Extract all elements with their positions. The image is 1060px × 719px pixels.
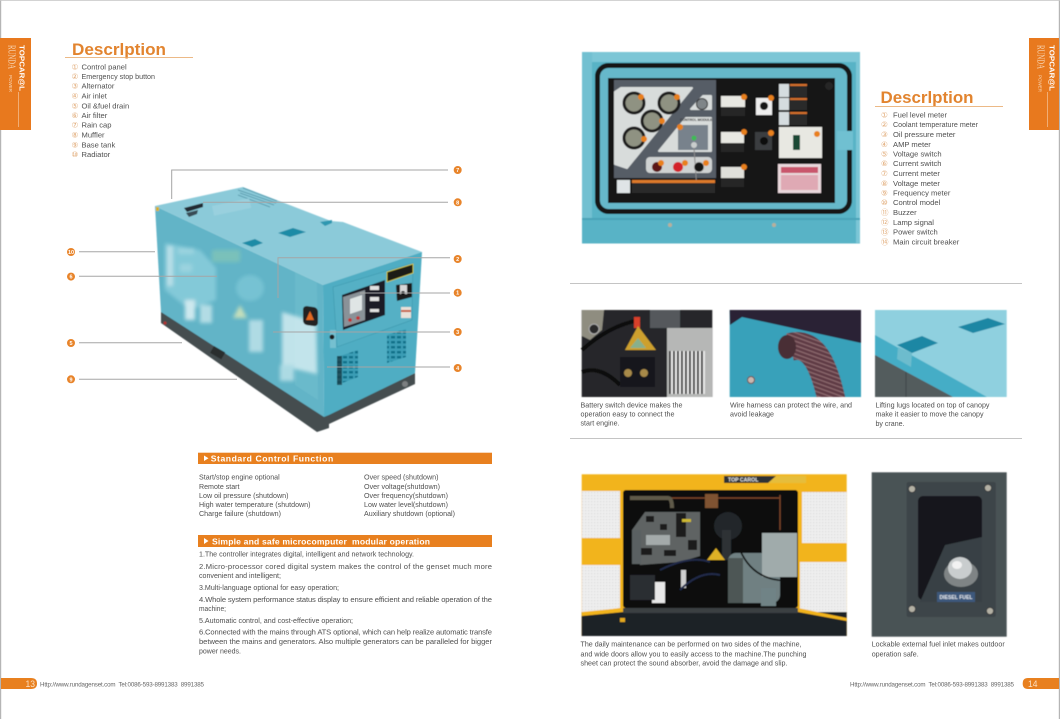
numbered paragraph: 2.Micro-processor cored digital system makes the control of the genset much more: [199, 562, 492, 571]
section: microcomputer modular operation: [198, 535, 492, 656]
footer left: Http://www.rundagenset.com Tel:0086-593-8991383 8991385: [40, 682, 205, 689]
parts list right: Oil pressure meter: [893, 130, 956, 139]
numbered paragraph: 6.Connected with the mains through ATS optional, which can help realize automatic transfe: [199, 628, 492, 636]
parts list right: Lamp signal: [893, 218, 934, 227]
base frame: [161, 311, 415, 432]
engine bay: [623, 490, 798, 608]
top panel: [155, 187, 422, 285]
rain cap: [184, 203, 203, 217]
black mounting plate: [608, 78, 835, 203]
red warning label: [778, 164, 821, 193]
parts list right: Power switch: [893, 228, 938, 236]
parts list left: ①: [72, 62, 78, 71]
function list column 2: Over voltage(shutdown): [364, 482, 440, 491]
photo: control panel: [582, 52, 860, 244]
heading: description right: Descrlption: [880, 89, 974, 107]
parts list right: ⑤: [881, 150, 888, 158]
door gasket: [598, 66, 850, 212]
panel markers: [638, 94, 820, 170]
parts list left: Control panel: [82, 62, 127, 71]
function list column 1: High water temperature (shutdown): [199, 500, 311, 509]
parts list left: Base tank: [82, 140, 115, 149]
numbered paragraph: power needs.: [199, 646, 241, 656]
function list column 2: Auxiliary shutdown (optional): [364, 509, 455, 518]
parts list left: Air filter: [82, 111, 108, 120]
function list column 1: Charge failure (shutdown): [199, 509, 281, 518]
battery switch and filters: [707, 548, 725, 560]
parts list left: ⑥: [72, 111, 78, 120]
callout markers: 8: [456, 200, 459, 206]
fuel label: DIESEL FUEL: [940, 595, 972, 601]
callout markers: 7: [456, 168, 459, 174]
parts list right: ⑩: [881, 198, 888, 207]
warning stickers: [779, 84, 807, 97]
function list column 2: [364, 472, 455, 518]
caption: battery switch: operation easy to connect the: [580, 410, 674, 418]
caption: daily maintenance: The daily maintenance can be performed on two sides of the machine,: [580, 640, 802, 649]
brand name RUNDA: RUNDA: [6, 45, 16, 70]
side vents: [337, 350, 358, 385]
brand word POWER: POWER: [8, 75, 13, 93]
brand name TOPCAROL: TOPCAR@L: [18, 45, 26, 91]
function list column 1: Low oil pressure (shutdown): [199, 491, 289, 500]
yellow label: [387, 264, 413, 282]
caption: fuel inlet: operation safe.: [872, 649, 919, 658]
parts list right: Control model: [893, 198, 941, 207]
parts list right: ②: [881, 120, 888, 129]
caption: battery switch: [580, 400, 682, 428]
heading: description left: Descrlption: [72, 41, 166, 59]
hinges and screws: [837, 131, 853, 150]
parts list right: Current switch: [893, 159, 942, 168]
parts list right: ⑥: [881, 159, 888, 168]
numbered paragraph: 3.Multi-language optional for easy operation;: [199, 583, 339, 592]
parts list right: Frequency meter: [893, 188, 951, 198]
buttons: [652, 162, 662, 172]
brand name TOPCAROL: TOPCAR@L: [1048, 45, 1056, 91]
caption: wire harness: Wire harness can protect the wire, and: [730, 400, 852, 410]
parts list left: Radiator: [82, 150, 111, 159]
ghost engine view: [165, 243, 317, 381]
function list column 1: Start/stop engine optional: [199, 472, 280, 481]
footer right: 14: [1028, 679, 1038, 689]
photo: battery switch: [582, 310, 712, 397]
caption: daily maintenance: and wide doors allow you to easily access to the machine.The punching: [580, 649, 806, 658]
photo: fuel inlet: [872, 472, 1007, 637]
numbered paragraph: convenient and intelligent;: [199, 571, 281, 580]
numbered paragraph: 5.Automatic control, and cost-effective operation;: [199, 616, 353, 625]
parts list left: ⑤: [72, 101, 78, 110]
parts list right: ⑫: [881, 218, 889, 227]
caption: fuel inlet: [872, 640, 1005, 658]
parts list right: Fuel level meter: [893, 110, 947, 120]
parts list right: Buzzer: [893, 208, 917, 217]
parts list left: [72, 62, 155, 159]
footer right: Http://www.rundagenset.com Tel:0086-593-8991383 8991385: [850, 682, 1015, 689]
lifting slots: [242, 239, 263, 247]
parts list right: ①: [881, 110, 888, 120]
parts list left: ⑧: [72, 131, 78, 140]
heading bar: Standard Control Function: [211, 453, 333, 463]
numbered paragraph: machine;: [199, 604, 226, 613]
callout leader lines: [79, 170, 450, 379]
function list column 1: [199, 472, 311, 518]
parts list left: ⑦: [72, 121, 78, 130]
top vents: [238, 188, 277, 207]
control module: [678, 125, 708, 150]
numbered paragraph: between the mains and generators. Also multiple generators can be paralleled for bigger: [199, 637, 492, 646]
engine block: [632, 512, 700, 565]
parts list left: Air inlet: [82, 91, 108, 100]
function list column 2: Low water level(shutdown): [364, 500, 448, 509]
callout markers: 4: [456, 366, 460, 372]
section: standard control function: [198, 453, 492, 518]
gauge panel: [614, 80, 716, 178]
parts list right: Coolant temperature meter: [893, 120, 978, 129]
base: [582, 612, 847, 636]
parts list left: ④: [72, 91, 78, 100]
parts list left: Rain cap: [82, 121, 111, 130]
function list column 2: Over speed (shutdown): [364, 472, 439, 481]
generator illustration: [155, 187, 422, 432]
caption: lifting lugs: by crane.: [876, 419, 904, 428]
parts list left: Emergency stop button: [82, 72, 155, 81]
callout markers: 3: [456, 330, 459, 336]
left brand tab: [0, 38, 31, 130]
control screen: [342, 280, 385, 330]
door panel on side: [295, 272, 318, 400]
caption: battery switch: start engine.: [580, 418, 620, 428]
caption: daily maintenance: sheet can protect the sound absorber, avoid the damage and slip.: [580, 659, 788, 668]
caption: lifting lugs: Lifting lugs located on top of canopy: [876, 400, 990, 410]
brand name RUNDA: RUNDA: [1034, 45, 1046, 70]
fuel cap: [944, 561, 978, 587]
parts list right: AMP meter: [893, 140, 931, 149]
caption: lifting lugs: [876, 400, 990, 428]
parts list right: Main circuit breaker: [893, 238, 960, 246]
parts list right: ③: [881, 130, 888, 139]
parts list right: Voltage meter: [893, 179, 940, 188]
parts list right: ⑬: [881, 228, 889, 236]
warning strip: [617, 180, 630, 193]
callout markers: 6: [69, 275, 73, 281]
photo: wire harness: [730, 310, 861, 402]
parts list right: ⑪: [881, 208, 889, 217]
control door: [333, 263, 413, 347]
footer left: [1, 678, 205, 689]
parts list right: ④: [881, 140, 888, 149]
function list column 1: Remote start: [199, 482, 240, 491]
photo: control panel: CONTROL MODULE: [680, 118, 713, 122]
right brand tab: [1029, 38, 1059, 130]
warning sticker: [401, 307, 411, 318]
parts list right: Current meter: [893, 169, 940, 178]
front panel: [323, 252, 422, 417]
gauges: [624, 93, 679, 148]
meters: [721, 96, 745, 107]
callout markers: 2: [456, 257, 459, 263]
callout markers: 10: [68, 250, 74, 256]
caption: fuel inlet: Lockable external fuel inlet makes outdoor: [872, 640, 1005, 649]
footer left: 13: [26, 679, 35, 689]
heading bar: Simple and safe microcomputer modular operation: [212, 536, 430, 546]
numbered paragraph: 1.The controller integrates digital, intelligent and network technology.: [199, 550, 414, 558]
alternator: [728, 553, 780, 603]
parts list right: ⑧: [881, 179, 888, 188]
parts list right: ⑦: [881, 169, 888, 178]
numbered paragraph: 4.Whole system performance status display to ensure efficient and reliable operation of the: [199, 595, 492, 604]
parts list left: Muffler: [82, 131, 105, 140]
callout markers: 5: [69, 341, 73, 347]
left side panel: [155, 206, 324, 417]
canopy brand label: TOP CAROL: [728, 478, 759, 484]
parts list right: ⑨: [881, 188, 888, 198]
function list column 2: Over frequency(shutdown): [364, 491, 448, 500]
parts list left: ③: [72, 82, 78, 91]
caption: wire harness: avoid leakage: [730, 410, 774, 418]
caption: wire harness: [730, 400, 852, 418]
callout markers: [67, 166, 462, 383]
callout markers: 1: [456, 291, 459, 297]
muffler button: [303, 306, 318, 327]
fuel label: [937, 592, 975, 602]
callout markers: 9: [69, 377, 73, 383]
lock: [330, 330, 336, 348]
photo: open canopy with engine: [582, 474, 847, 636]
brand word POWER: POWER: [1038, 75, 1042, 93]
parts list left: Oil &fuel drain: [82, 101, 129, 110]
parts list left: ⑨: [72, 140, 78, 149]
door panels: [582, 491, 620, 538]
parts list right: [881, 110, 978, 246]
selector switches: [756, 98, 772, 115]
footer right: [850, 678, 1059, 689]
photo: lifting lugs: [875, 310, 1007, 397]
parts list right: Voltage switch: [893, 150, 942, 158]
heading bar: [198, 535, 492, 547]
air filter: [714, 512, 742, 540]
parts list left: ②: [72, 72, 78, 81]
parts list left: ⑩: [72, 150, 78, 159]
main breaker: [779, 127, 822, 158]
caption: lifting lugs: make it easier to move the canopy: [876, 410, 984, 418]
caption: battery switch: Battery switch device makes the: [580, 400, 682, 410]
parts list left: Alternator: [82, 82, 115, 91]
canopy brand label: [724, 476, 806, 484]
numbered paragraph: [199, 550, 492, 656]
caption: daily maintenance: [580, 640, 806, 668]
breaker box: [396, 283, 412, 301]
parts list right: ⑭: [881, 238, 889, 246]
heading bar: [198, 453, 492, 464]
pipes: [665, 495, 780, 530]
